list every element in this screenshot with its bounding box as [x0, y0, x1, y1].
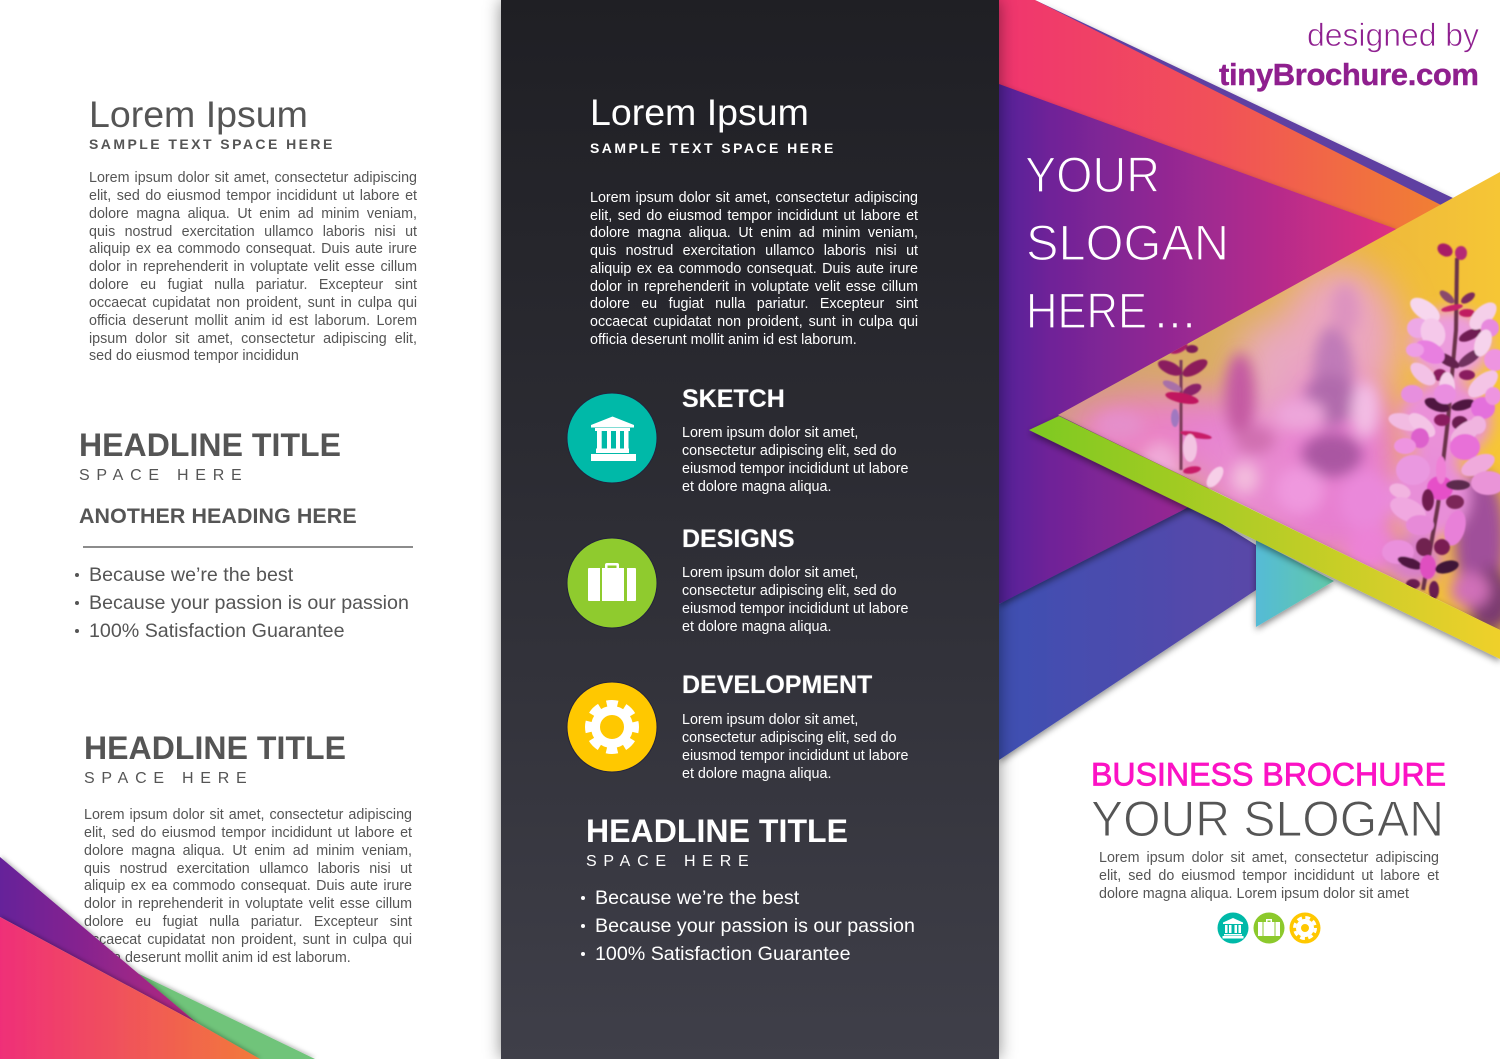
feature text: sketch: consectetur adipiscing elit, sed do — [682, 443, 897, 459]
slogan: your slogan here: SLOGAN — [1026, 215, 1229, 271]
icon: gear — [567, 682, 657, 772]
subheading: sample text: SAMPLE TEXT SPACE HERE — [590, 140, 836, 156]
text block: cover paragraph: Lorem ipsum dolor sit amet, consectetur adipiscing — [1099, 850, 1439, 866]
decorative corner triangles — [0, 856, 315, 1059]
bullet list: Because your passion is our passion — [89, 592, 409, 614]
text: tinyBrochure.com: tinyBrochure.com — [1219, 57, 1479, 92]
text block: lower paragraph: dolor in reprehenderit in voluptate velit esse cillum — [84, 896, 412, 912]
heading: Lorem Ipsum: Lorem Ipsum — [590, 91, 809, 133]
feature text: sketch: Lorem ipsum dolor sit amet, — [682, 425, 858, 441]
subheading: space here: SPACE HERE — [586, 853, 755, 870]
slogan: your slogan here: HERE — [1026, 283, 1147, 339]
text block: intro paragraph: aliquip ex ea commodo consequat. Duis aute irure — [590, 261, 918, 277]
heading: headline title: HEADLINE TITLE — [586, 813, 848, 849]
feature text: sketch — [682, 425, 908, 495]
text block: intro paragraph: officia deserunt mollit anim id est laborum. — [590, 332, 857, 348]
blurred background flowers — [1060, 265, 1500, 632]
text block: intro paragraph: quis nostrud exercitation ullamco laboris nisi ut — [89, 224, 417, 240]
subheading: space here: SPACE HERE — [79, 467, 248, 484]
text block: intro paragraph: Lorem ipsum dolor sit amet, consectetur adipiscing — [590, 190, 918, 206]
text: designed by: designed by — [1307, 17, 1479, 53]
feature text: sketch: eiusmod tempor incididunt ut labore — [682, 461, 908, 477]
divider line — [83, 546, 413, 548]
feature text: designs: Lorem ipsum dolor sit amet, — [682, 565, 858, 581]
shape: blue purple stripe — [1035, 0, 1453, 212]
feature text: designs: consectetur adipiscing elit, sed do — [682, 583, 897, 599]
text block: lower paragraph: quis nostrud exercitation ullamco laboris nisi ut — [84, 861, 412, 877]
feature text: development: consectetur adipiscing elit, sed do — [682, 730, 897, 746]
text block: intro paragraph: quis nostrud exercitation ullamco laboris nisi ut — [590, 243, 918, 259]
feature text: designs: et dolore magna aliqua. — [682, 619, 831, 635]
corner: pink orange triangle — [0, 917, 260, 1059]
icon: bank — [567, 393, 657, 483]
shape: teal triangle — [1256, 540, 1334, 627]
feature text: development: eiusmod tempor incididunt ut labore — [682, 748, 908, 764]
text block: cover paragraph: elit, sed do eiusmod tempor incididunt ut labore et — [1099, 868, 1439, 884]
text block: intro paragraph: occaecat cupidatat non proident, sunt in culpa qui — [89, 295, 417, 311]
text block: intro paragraph: dolore magna aliqua. Ut enim ad minim veniam, — [89, 206, 417, 222]
title: business brochure: BUSINESS BROCHURE — [1091, 756, 1446, 792]
text block: intro paragraph: dolore eu fugiat nulla pariatur. Excepteur sint — [590, 296, 918, 312]
shape: purple magenta triangle — [999, 84, 1396, 604]
feature text: development — [682, 712, 908, 782]
corner: green strip — [135, 972, 315, 1059]
text block: lower paragraph: occaecat cupidatat non proident, sunt in culpa qui — [84, 932, 412, 948]
shape: green yellow diagonal bar — [1029, 416, 1500, 659]
icons: bank, briefcase and gear circles — [566, 392, 658, 772]
text block: intro paragraph: elit, sed do eiusmod tempor incididunt ut labore et — [89, 188, 417, 204]
feature heading: development: DEVELOPMENT — [682, 671, 872, 699]
bullet list: Because we’re the best — [89, 564, 293, 586]
slogan: your slogan here: ... — [1154, 283, 1196, 339]
text block: intro paragraph: occaecat cupidatat non proident, sunt in culpa qui — [590, 314, 918, 330]
text block: intro paragraph: dolor in reprehenderit in voluptate velit esse cillum — [590, 279, 918, 295]
panel: center dark column — [501, 0, 999, 1059]
shape: blue panel — [999, 500, 1256, 760]
feature: development — [682, 671, 908, 782]
feature: sketch — [682, 385, 908, 495]
flower spike: sharp right — [1382, 241, 1500, 599]
corner: purple triangle — [0, 857, 197, 1023]
panel: left column — [75, 93, 417, 966]
subtitle: your slogan: YOUR SLOGAN — [1091, 791, 1444, 847]
text block: intro paragraph: aliquip ex ea commodo consequat. Duis aute irure — [89, 241, 417, 257]
slogan: your slogan here — [1025, 147, 1229, 339]
subheading: second space here: SPACE HERE — [84, 770, 253, 787]
text block: lower paragraph: aliquip ex ea commodo consequat. Duis aute irure — [84, 878, 412, 894]
feature: designs — [682, 525, 908, 635]
text block: intro paragraph: officia deserunt mollit anim id est laborum. Lorem — [89, 313, 417, 329]
icon: small bank — [1218, 912, 1248, 944]
text block: lower paragraph: elit, sed do eiusmod tempor incididunt ut labore et — [84, 825, 412, 841]
icon: briefcase — [567, 538, 657, 628]
icon: small briefcase — [1254, 912, 1284, 944]
text block: cover paragraph: dolore magna aliqua. Lorem ipsum dolor sit amet — [1099, 886, 1409, 902]
bullet list: 100% Satisfaction Guarantee — [89, 620, 344, 642]
feature heading: sketch: SKETCH — [682, 385, 785, 413]
bullet list: 100% Satisfaction Guarantee — [595, 943, 850, 965]
feature heading: designs: DESIGNS — [682, 525, 795, 553]
feature text: designs — [682, 565, 908, 635]
bullet list: Because we’re the best — [595, 887, 799, 909]
text block: lower paragraph: officia deserunt mollit anim id est laborum. — [84, 950, 351, 966]
heading: headline title: HEADLINE TITLE — [79, 427, 341, 463]
icon: small gear — [1290, 912, 1320, 944]
text block: intro paragraph: ipsum dolor sit amet, consectetur adipiscing elit, — [89, 331, 417, 347]
heading: second headline title: HEADLINE TITLE — [84, 730, 346, 766]
text block: lower paragraph — [84, 807, 412, 966]
feature text: sketch: et dolore magna aliqua. — [682, 479, 831, 495]
photo: lavender flowers on yellow — [1050, 170, 1500, 640]
shape: pink orange band — [999, 0, 1441, 240]
bullet list — [581, 887, 915, 965]
text block: cover paragraph — [1099, 850, 1439, 902]
flower spike: small left — [1156, 340, 1227, 490]
panel: right cover — [999, 0, 1500, 944]
text block: intro paragraph: dolore eu fugiat nulla pariatur. Excepteur sint — [89, 277, 417, 293]
text block: intro paragraph: Lorem ipsum dolor sit amet, consectetur adipiscing — [89, 170, 417, 186]
text block: lower paragraph: dolore eu fugiat nulla pariatur. Excepteur sint — [84, 914, 412, 930]
text block: lower paragraph: Lorem ipsum dolor sit amet, consectetur adipiscing — [84, 807, 412, 823]
icon row — [1218, 912, 1320, 944]
text block: intro paragraph: elit, sed do eiusmod tempor incididunt ut labore et — [590, 208, 918, 224]
text block: intro paragraph — [89, 170, 417, 364]
bullet list — [75, 564, 409, 642]
slogan: your slogan here: YOUR — [1025, 147, 1160, 203]
text block: lower paragraph: dolore magna aliqua. Ut enim ad minim veniam, — [84, 843, 412, 859]
subheading: sample text: SAMPLE TEXT SPACE HERE — [89, 136, 335, 152]
heading: Lorem Ipsum: Lorem Ipsum — [89, 93, 308, 135]
text block: intro paragraph: sed do eiusmod tempor incididun — [89, 348, 299, 364]
feature text: development: Lorem ipsum dolor sit amet, — [682, 712, 858, 728]
text block: intro paragraph — [590, 190, 918, 348]
text block: intro paragraph: dolor in reprehenderit in voluptate velit esse cillum — [89, 259, 417, 275]
text block: intro paragraph: dolore magna aliqua. Ut enim ad minim veniam, — [590, 225, 918, 241]
feature text: development: et dolore magna aliqua. — [682, 766, 831, 782]
heading: another heading: ANOTHER HEADING HERE — [79, 504, 357, 528]
bullet list: Because your passion is our passion — [595, 915, 915, 937]
feature text: designs: eiusmod tempor incididunt ut labore — [682, 601, 908, 617]
